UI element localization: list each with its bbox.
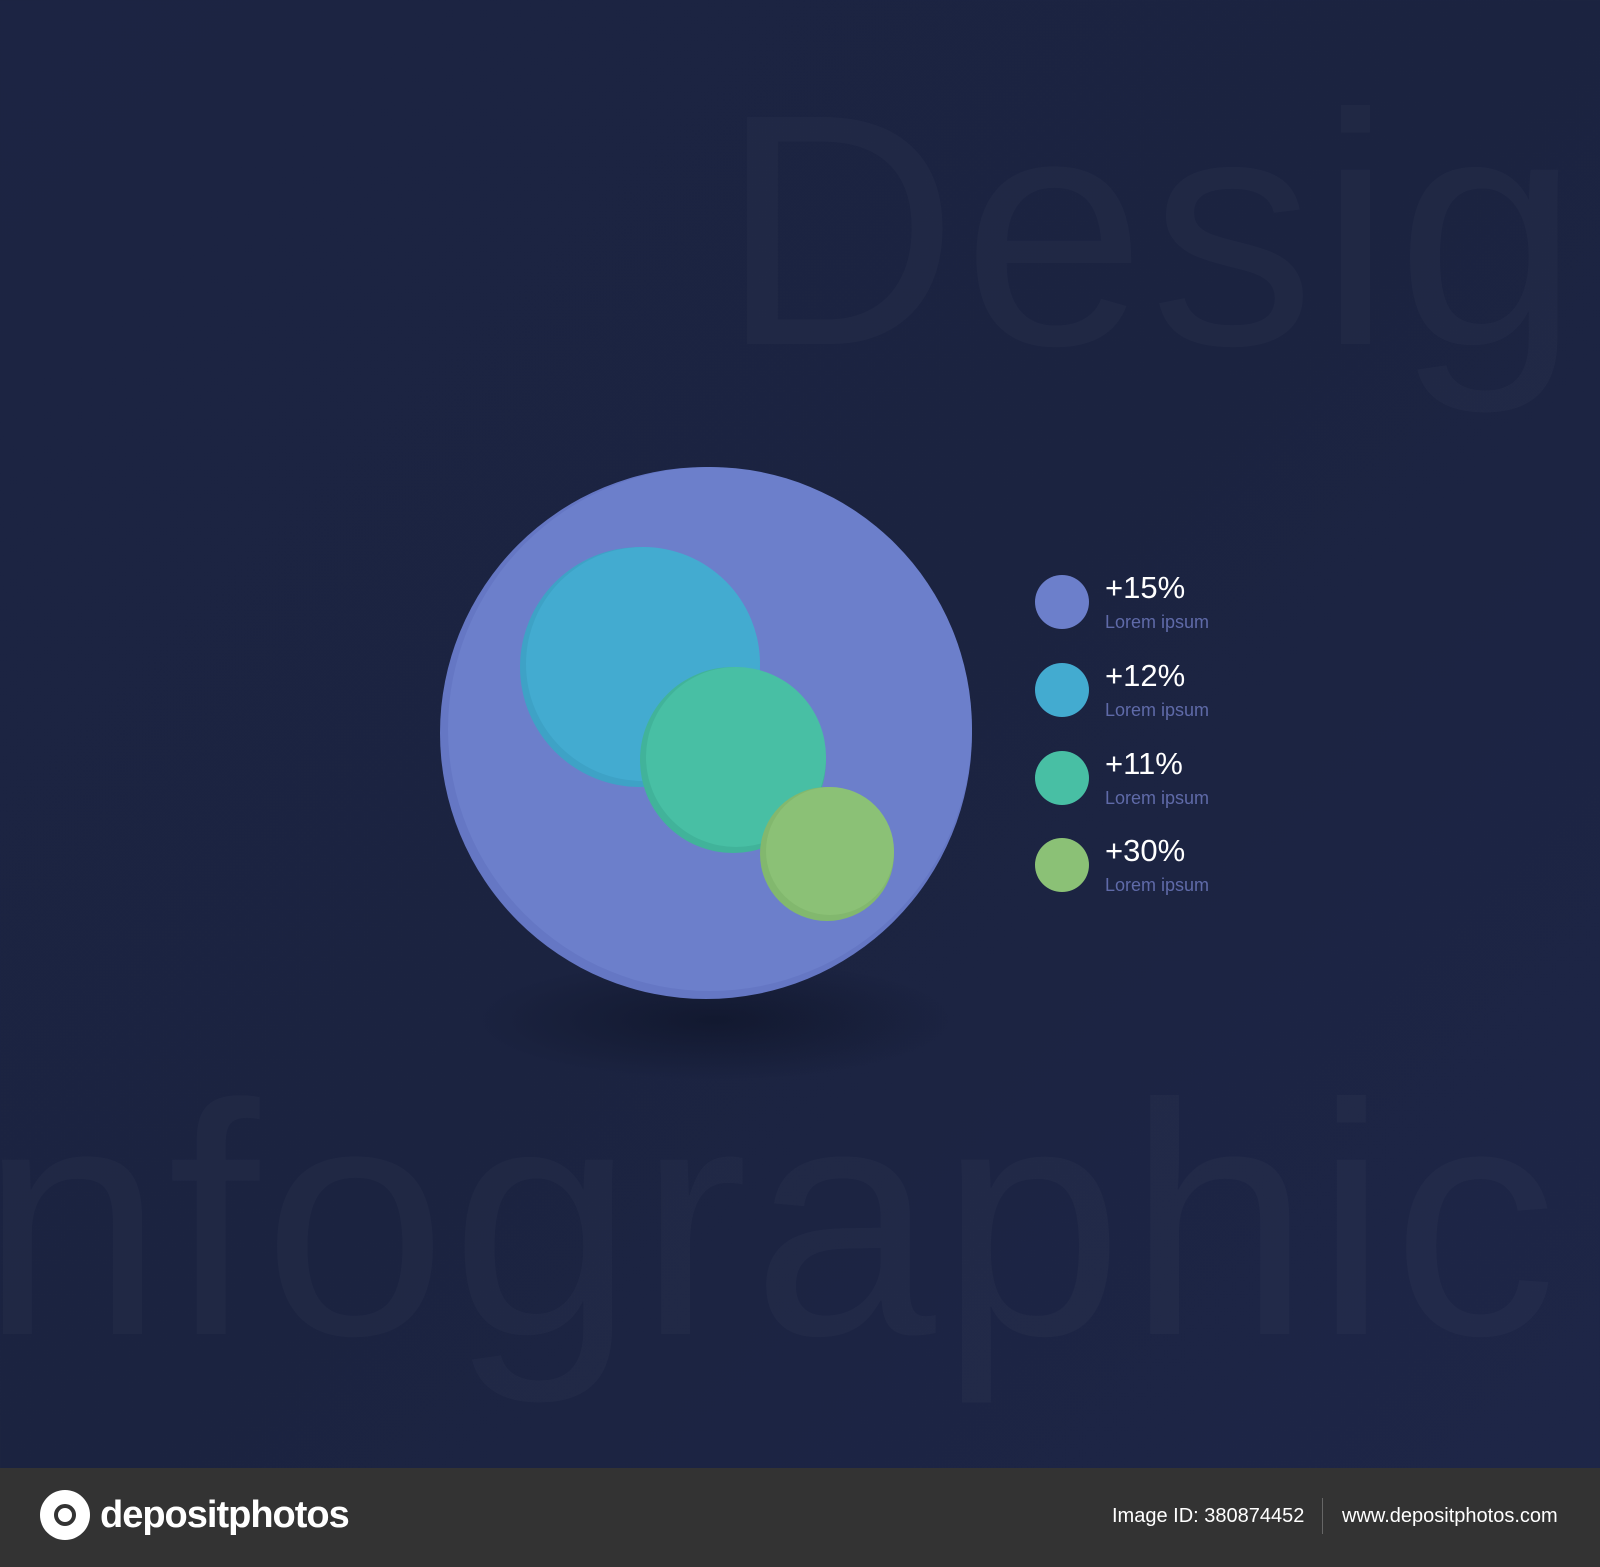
legend: Lorem ipsum: [1105, 612, 1209, 632]
legend: +11%: [1105, 746, 1183, 781]
footer logo: [40, 1490, 349, 1540]
legend item 2: [1035, 658, 1209, 720]
footer url: www.depositphotos.com: [1342, 1505, 1558, 1527]
legend item 3: [1035, 746, 1209, 808]
legend: Lorem ipsum: [1105, 700, 1209, 720]
blue circle: [520, 547, 760, 787]
legend item 1: [1035, 570, 1209, 632]
legend: Lorem ipsum: [1105, 788, 1209, 808]
big circle: [440, 467, 972, 999]
legend: [1035, 570, 1209, 895]
footer logo: depositphotos: [100, 1494, 349, 1536]
legend: Lorem ipsum: [1105, 875, 1209, 895]
legend: +30%: [1105, 833, 1185, 868]
footer bar: [0, 1468, 1600, 1567]
legend: +12%: [1105, 658, 1185, 693]
teal circle: [640, 667, 826, 853]
footer image id: Image ID: 380874452: [1112, 1505, 1304, 1527]
background word: Infographic: nfographic: [0, 1035, 1561, 1404]
legend item 4: [1035, 833, 1209, 895]
green circle: [760, 787, 894, 921]
legend: +15%: [1105, 570, 1185, 605]
